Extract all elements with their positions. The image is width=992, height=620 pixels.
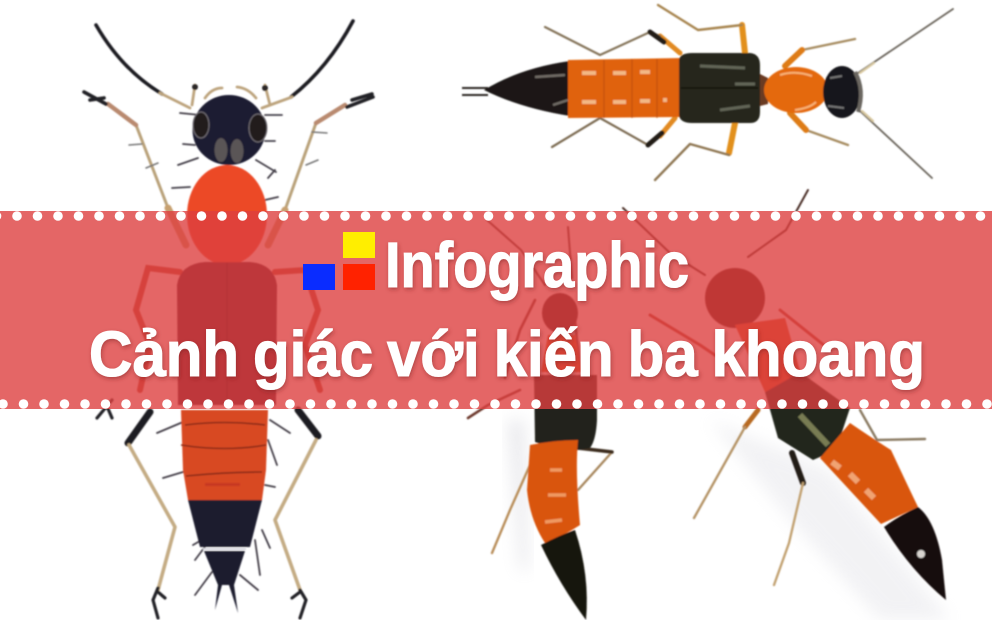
- icon: coloured squares logo: [303, 232, 375, 290]
- top perforation dots: [0, 211, 985, 221]
- soft shadow: [710, 420, 950, 620]
- dark tail segment: [188, 500, 262, 547]
- beetle body and legs: [468, 220, 612, 620]
- hind legs: [97, 400, 318, 618]
- abdomen: [181, 410, 268, 500]
- bristles: [157, 113, 290, 595]
- front legs: [84, 92, 373, 210]
- bottom perforation dots: [0, 399, 992, 409]
- antennae: [96, 21, 353, 108]
- thorax: [187, 165, 267, 265]
- beetle body and legs: [623, 190, 946, 600]
- head: [192, 95, 266, 165]
- legs and antennae: [545, 5, 953, 180]
- banner: [0, 211, 992, 409]
- title: Cảnh giác với kiến ba khoang: Cảnh giác với kiến ba khoang: [89, 318, 925, 390]
- photograph: rove beetle horizontal, top right: [462, 5, 953, 180]
- banner band: [0, 211, 992, 409]
- tail tip: [204, 551, 245, 613]
- photograph: rove beetle diagonal, bottom right: [623, 190, 950, 620]
- photograph: rove beetle pointing down, bottom centre: [468, 220, 612, 620]
- heading: Infographic: Infographic: [385, 229, 689, 301]
- elytra: [177, 262, 277, 405]
- mid legs: [136, 268, 320, 390]
- body: [462, 88, 488, 95]
- soft shadow: [508, 420, 528, 570]
- illustration: rove beetle, top view on the left: [84, 21, 373, 618]
